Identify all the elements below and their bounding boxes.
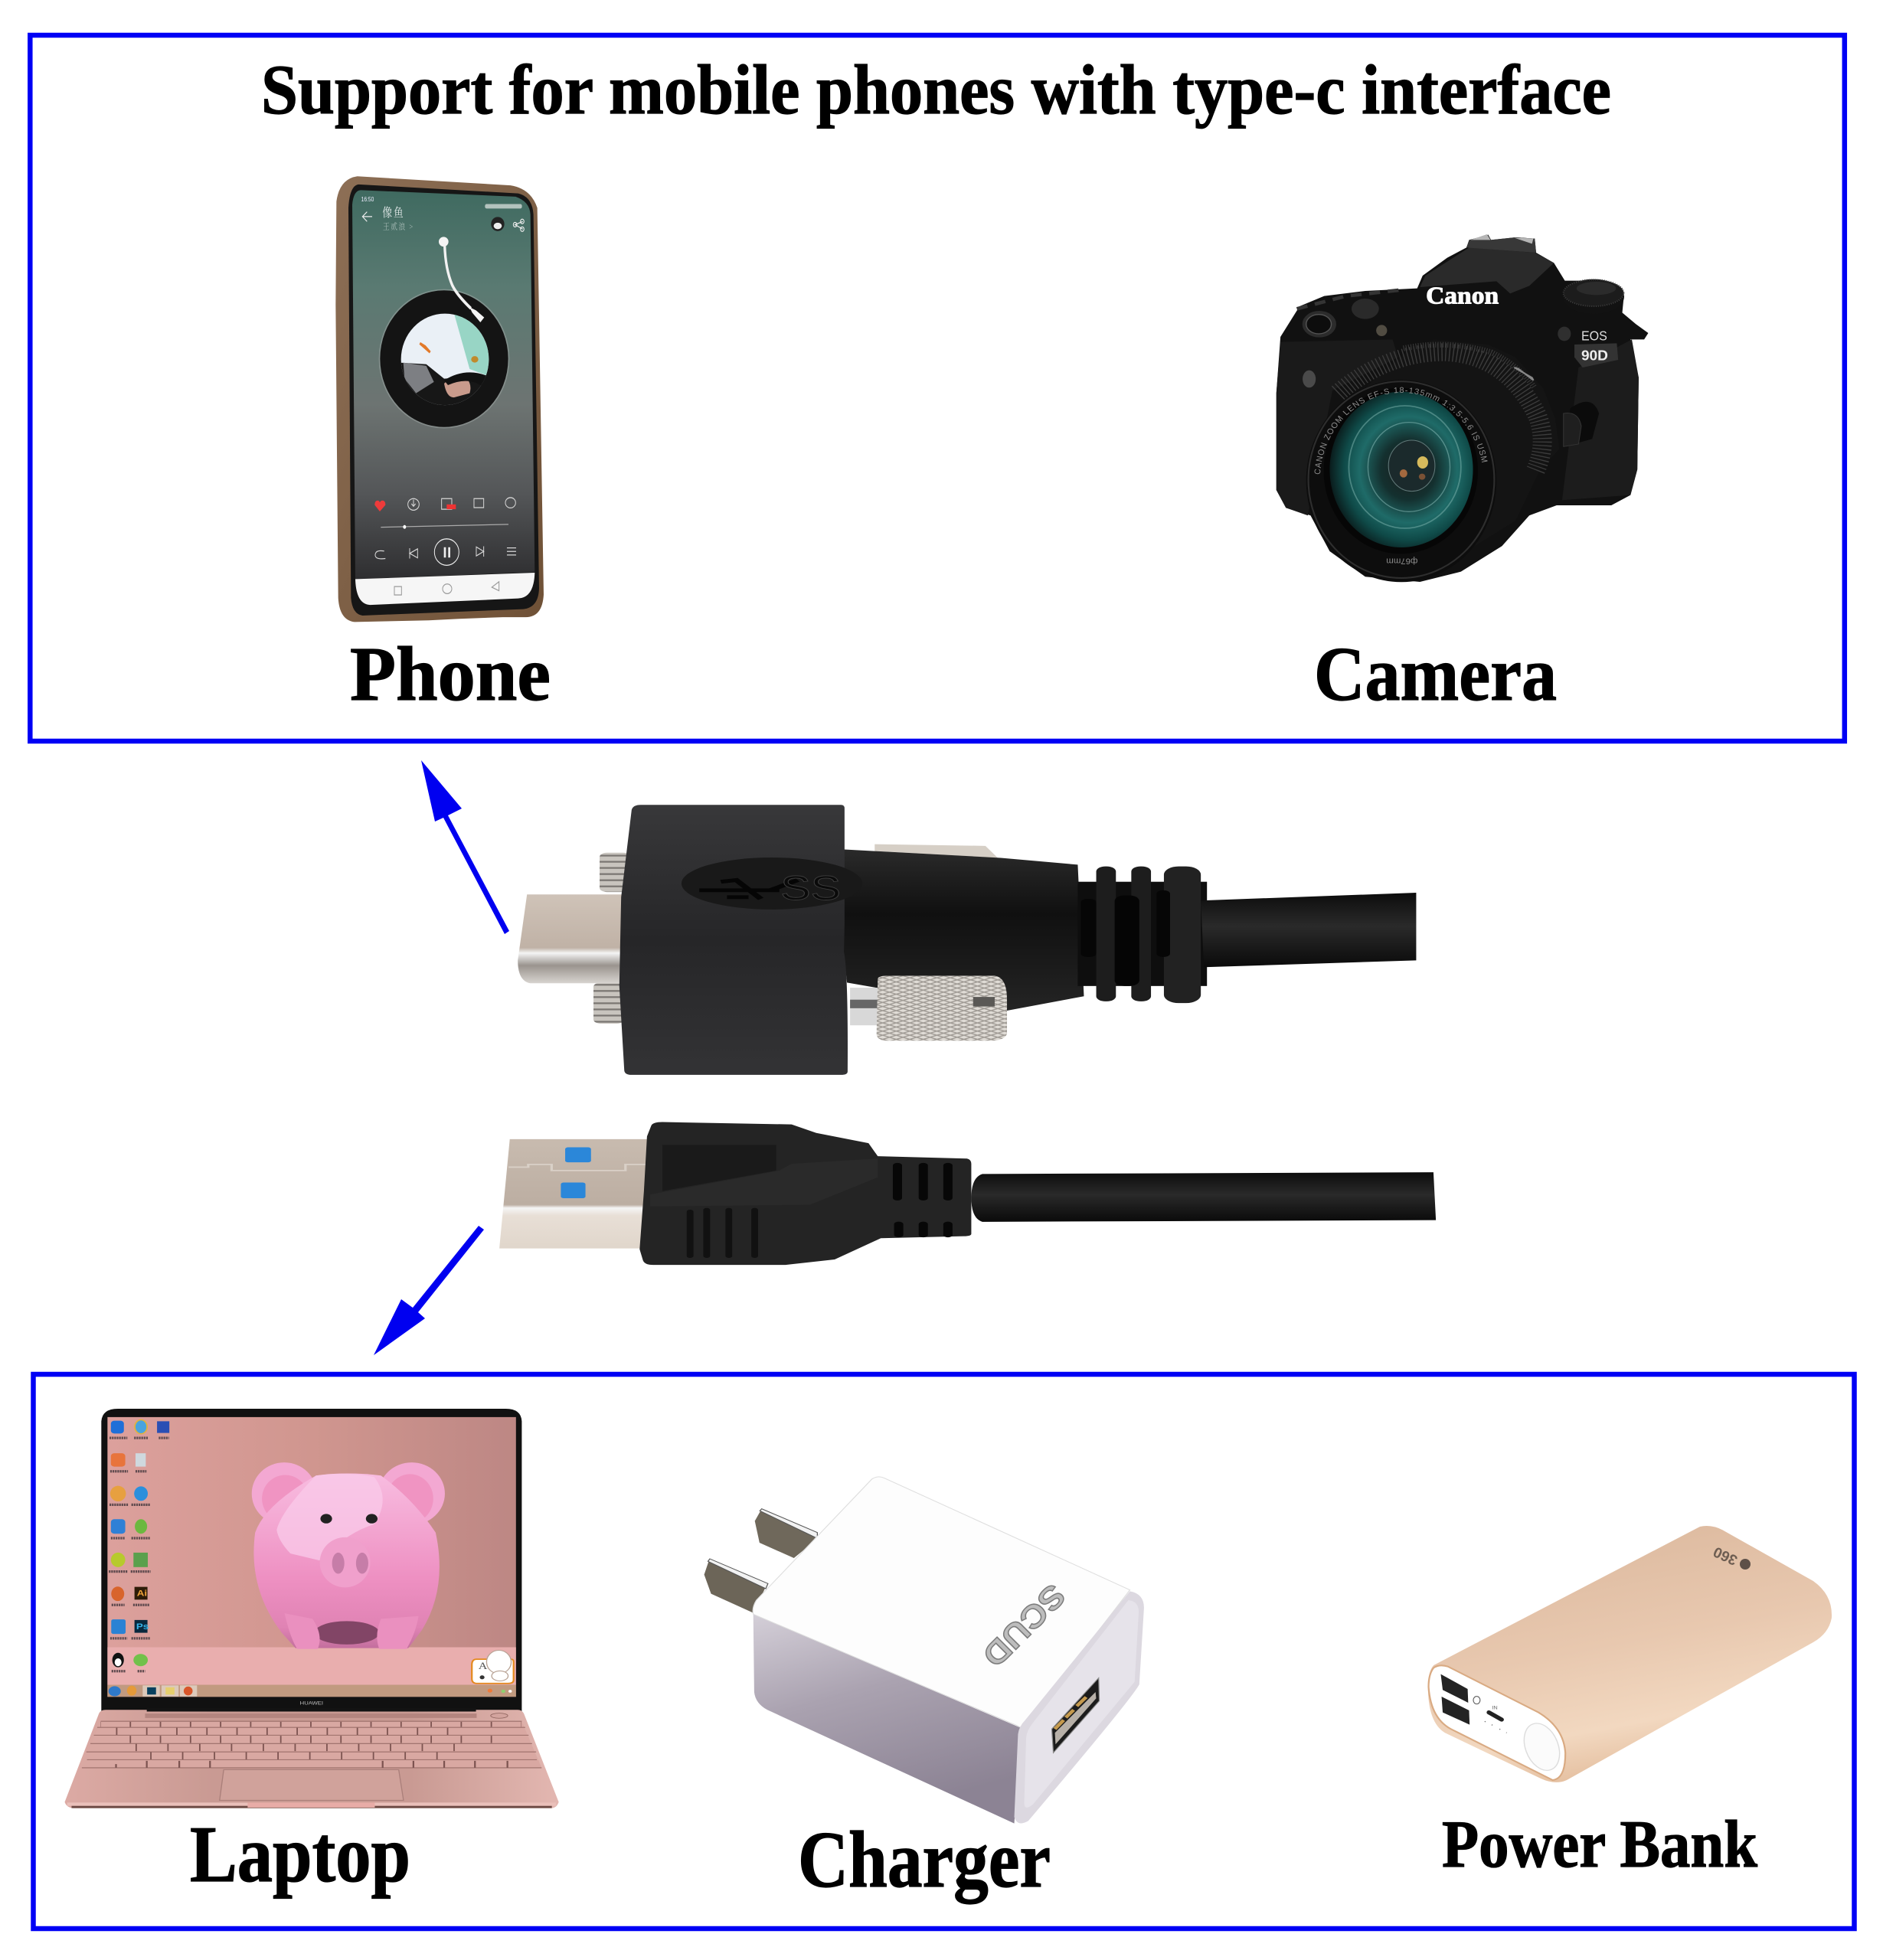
side face: [754, 1614, 1021, 1824]
panel frame: [34, 1374, 1855, 1929]
panel: USB-A host devices: [34, 1374, 1855, 1929]
power button: [1518, 1720, 1566, 1775]
panel frame: [30, 35, 1845, 741]
lens: [1306, 341, 1552, 582]
arrow: to USB-A devices: [374, 1226, 484, 1355]
laptop screen: [107, 1417, 516, 1697]
thumb screw threads: [593, 853, 630, 1024]
icon: charger: [704, 1477, 1144, 1824]
USB-A metal plug: [499, 1139, 652, 1249]
front knurled screw: [850, 975, 1007, 1040]
rear knurled screw: [874, 844, 998, 858]
phone screen: [352, 190, 534, 579]
desktop icons: Ai: [137, 1589, 147, 1598]
laptop lid: [101, 1409, 521, 1711]
cable: type-c screw lock connector: [518, 805, 1416, 1075]
camera body: [1277, 235, 1648, 582]
USB SS logo: SS: [780, 868, 841, 907]
touchpad: [220, 1769, 404, 1800]
piggy wallpaper: [252, 1462, 445, 1649]
USB ports: IN: [1492, 1706, 1498, 1711]
mounting plate: [619, 805, 848, 1075]
front face: [1015, 1591, 1144, 1823]
keyboard: [82, 1721, 541, 1768]
lens barrel text: CANON ZOOM LENS EF-S 18-135mm 1:3.5-5.6 IS USM: [1314, 387, 1488, 475]
vinyl record: [379, 289, 509, 428]
front edge: [67, 1802, 556, 1808]
desktop icons: Ps: [136, 1622, 149, 1632]
brand on bezel: HUAWEI: [300, 1701, 323, 1706]
prongs: [704, 1509, 817, 1613]
icon: camera: [1276, 234, 1648, 582]
grip top and shutter: [1297, 289, 1404, 387]
model text: [1558, 327, 1618, 446]
brand text: Canon: [1426, 283, 1499, 309]
sticker mascot: A: [479, 1661, 488, 1671]
taskbar: [107, 1685, 516, 1697]
sticker mascot: [472, 1651, 514, 1684]
label: power bank: Power Bank: [1442, 1808, 1757, 1882]
icon: power bank: [1428, 1526, 1832, 1782]
overmold: [841, 849, 1084, 1011]
icon: laptop: [65, 1409, 559, 1808]
label: laptop: Laptop: [190, 1809, 410, 1899]
laptop base: [65, 1710, 559, 1808]
label: camera: Camera: [1314, 631, 1557, 717]
arrow: to type-c devices: [421, 760, 509, 934]
player controls: [374, 498, 516, 565]
USB port: [1052, 1678, 1100, 1753]
USB-A overmold: [639, 1122, 971, 1265]
charger logo: SCUD: [976, 1577, 1073, 1674]
type-c metal plug: [518, 894, 623, 983]
power bank logo: [1711, 1543, 1751, 1570]
status and song text: 王贰浪 >: [383, 220, 414, 232]
status and song text: [361, 195, 524, 232]
desktop icons: [109, 1420, 169, 1671]
bank body: [1428, 1526, 1832, 1782]
filter size text: ф67mm: [1386, 556, 1417, 565]
end cap: [1429, 1665, 1565, 1780]
USB SS logo: [682, 858, 862, 910]
status and song text: 像鱼: [382, 206, 404, 220]
strain relief: [1077, 867, 1207, 1003]
top face: [753, 1477, 1130, 1728]
phone case: [335, 176, 544, 622]
prism and hot shoe: [1420, 234, 1554, 293]
model text: 90D: [1581, 348, 1608, 364]
navigation bar: [355, 573, 534, 605]
USB ports: [1440, 1674, 1507, 1733]
status and song text: 16:50: [361, 195, 374, 203]
icon: phone: [335, 176, 544, 622]
cable: USB-A connector: [499, 1122, 1436, 1265]
mode dial: [1563, 279, 1624, 314]
model text: EOS: [1581, 328, 1607, 343]
tonearm: [439, 237, 484, 322]
power bank logo: 360: [1711, 1543, 1740, 1568]
label: phone: Phone: [350, 631, 551, 717]
label: charger: Charger: [798, 1815, 1051, 1904]
cable: [1201, 893, 1416, 967]
title: Support for mobile phones with type-c interface: [261, 51, 1611, 129]
cable: [971, 1172, 1436, 1222]
panel: supported type-c devices: [28, 32, 1847, 744]
